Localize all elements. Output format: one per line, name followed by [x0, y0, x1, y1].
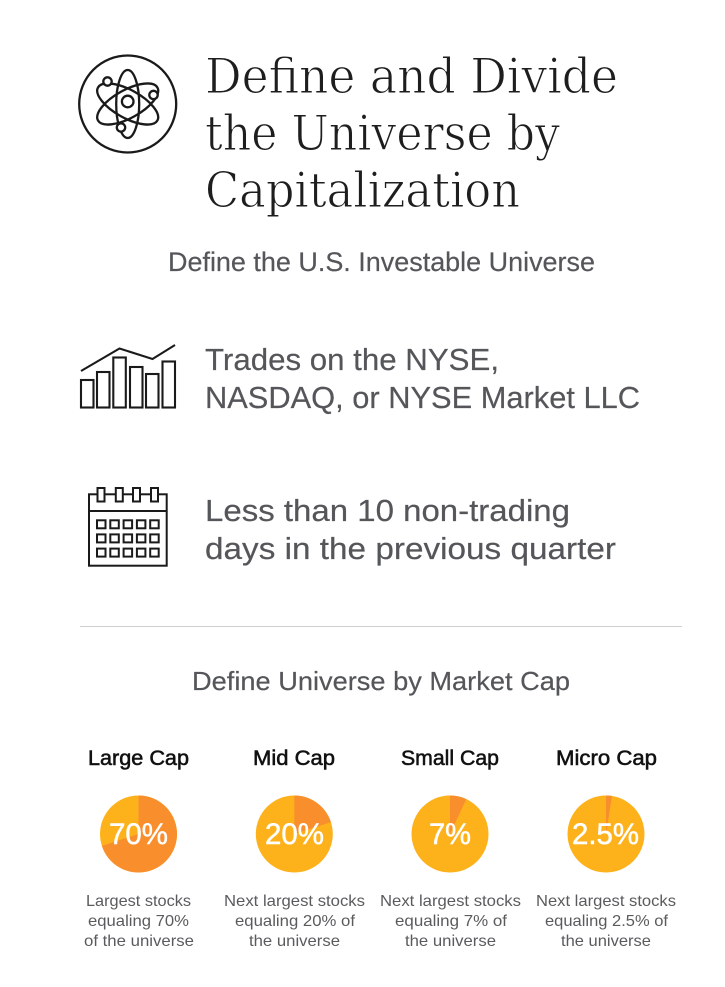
column: large cap: Large Cap [88, 747, 189, 770]
title [205, 48, 618, 219]
text: exchange criterion [205, 342, 640, 415]
icon: bar chart with trend line [81, 345, 175, 408]
icon: atom [79, 56, 176, 152]
column: micro cap: 2.5% [572, 818, 639, 851]
text: exchange criterion: Trades on the NYSE, [205, 342, 499, 377]
title: Define and Divide [205, 48, 618, 105]
column: small cap [380, 747, 521, 950]
column: large cap: of the universe [84, 933, 194, 950]
column: small cap: equaling 7% of [395, 913, 508, 930]
column: large cap [84, 747, 194, 950]
subheading: investable universe: Define the U.S. Investable Universe [168, 247, 595, 277]
column: mid cap: Next largest stocks [224, 893, 365, 910]
column: micro cap: equaling 2.5% of [545, 913, 669, 930]
column: micro cap: the universe [561, 933, 651, 950]
title: Capitalization [205, 162, 520, 219]
column: large cap: 70% [109, 818, 168, 851]
icon: calendar [89, 488, 167, 566]
text: exchange criterion: NASDAQ, or NYSE Market LLC [205, 380, 640, 415]
text: trading days criterion [205, 493, 616, 566]
column: mid cap: the universe [249, 933, 340, 950]
column: small cap: 7% [429, 818, 471, 851]
text: trading days criterion: days in the previous quarter [205, 531, 616, 566]
column: small cap: Small Cap [401, 747, 499, 770]
column: micro cap [536, 747, 676, 950]
column: small cap: Next largest stocks [380, 893, 521, 910]
column: micro cap: Next largest stocks [536, 893, 676, 910]
column: small cap: the universe [405, 933, 496, 950]
text: trading days criterion: Less than 10 non-trading [205, 493, 570, 528]
column: micro cap: Micro Cap [556, 747, 657, 770]
subheading: market cap: Define Universe by Market Cap [192, 666, 570, 696]
column: mid cap [224, 747, 365, 950]
column: mid cap: Mid Cap [253, 747, 335, 770]
column: large cap: Largest stocks [86, 893, 191, 910]
column: mid cap: equaling 20% of [235, 913, 356, 930]
title: the Universe by [205, 105, 560, 162]
column: mid cap: 20% [265, 818, 324, 851]
column: large cap: equaling 70% [88, 913, 189, 930]
